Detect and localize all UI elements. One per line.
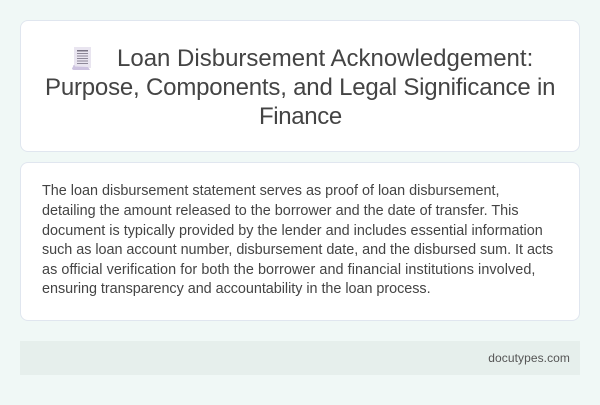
description text: The loan disbursement statement serves as proof of loan disbursement, xyxy=(42,183,500,199)
footer source text: docutypes.com xyxy=(488,351,570,365)
description text xyxy=(42,183,553,297)
footer bar xyxy=(20,341,580,375)
description text: as official verification for both the borrower and financial institutions involved, xyxy=(42,262,536,278)
icon: document receipt xyxy=(72,47,91,70)
panel: description card xyxy=(20,162,580,321)
description text: detailing the amount released to the borrower and the date of transfer. This xyxy=(42,203,519,219)
panel: title card xyxy=(20,20,580,152)
title text xyxy=(45,45,555,130)
description text: ensuring transparency and accountability in the loan process. xyxy=(42,281,431,297)
description text: document is typically provided by the lender and includes essential information xyxy=(42,223,543,239)
title text: Purpose, Components, and Legal Significance in xyxy=(45,74,555,101)
title text: Loan Disbursement Acknowledgement: xyxy=(117,45,533,72)
description text: such as loan account number, disbursement date, and the disbursed sum. It acts xyxy=(42,242,553,258)
title text: Finance xyxy=(259,103,342,130)
